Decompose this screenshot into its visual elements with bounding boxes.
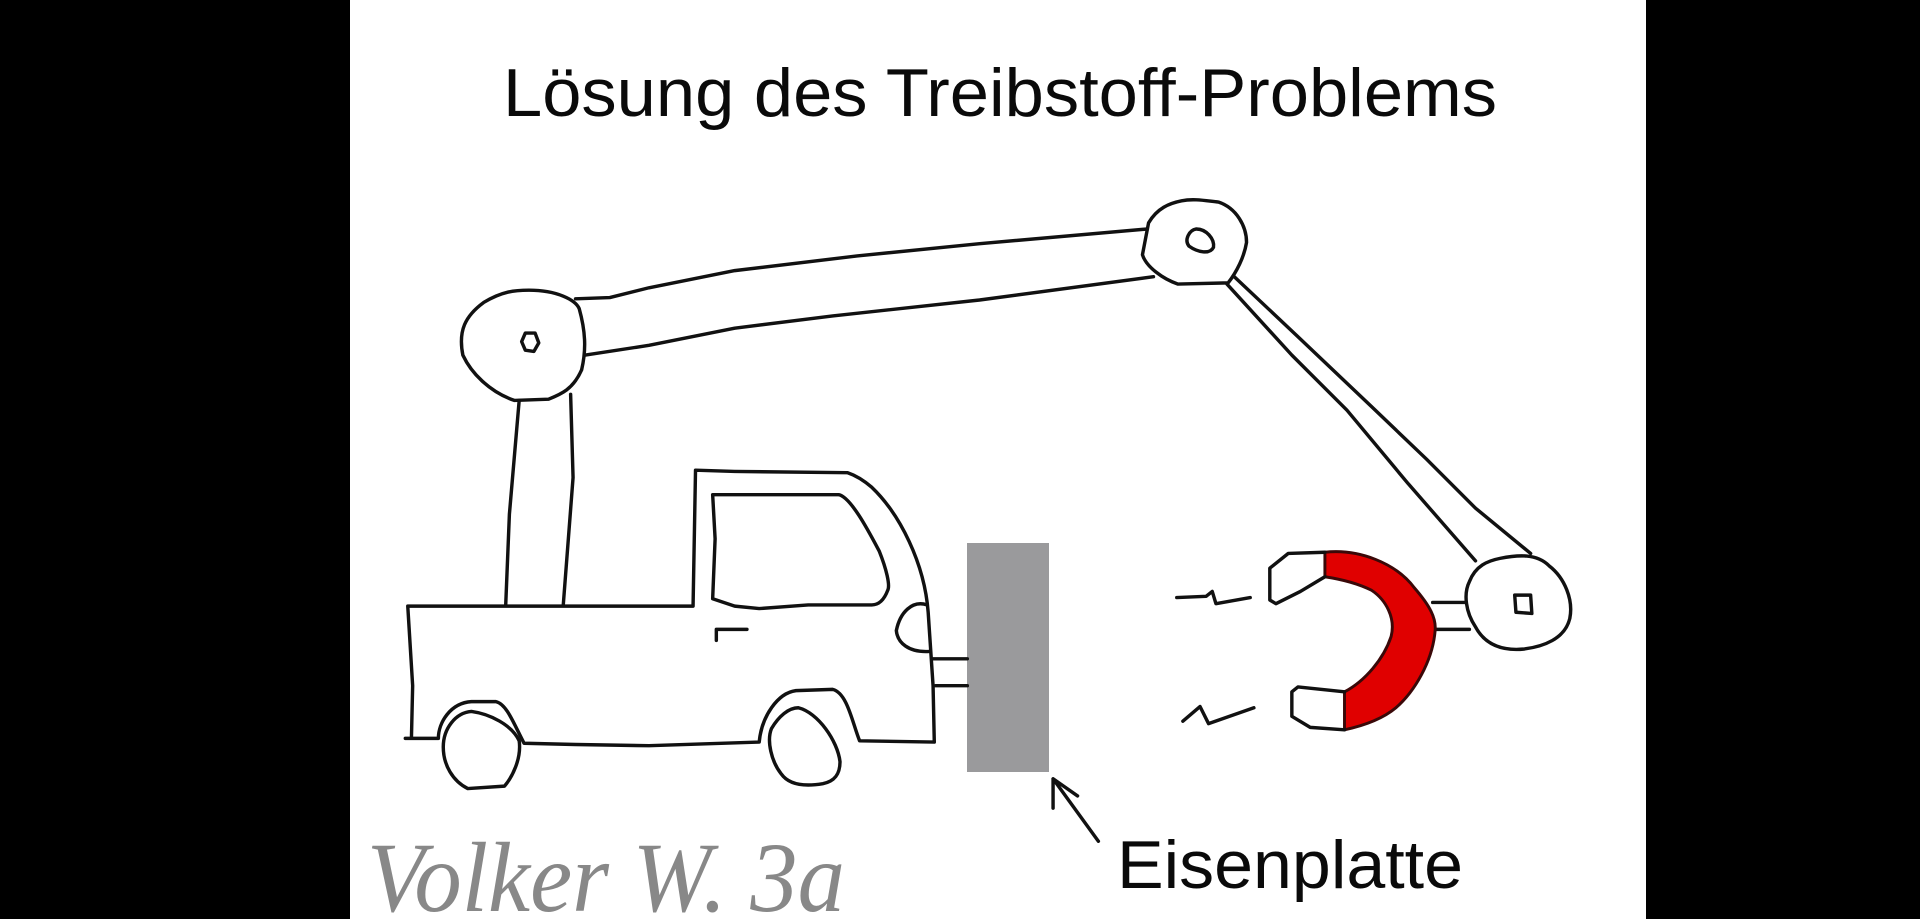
rear wheel bbox=[443, 711, 520, 789]
label: Eisenplatte: Eisenplatte bbox=[1117, 827, 1463, 903]
magnet pole top bbox=[1270, 552, 1325, 604]
joint: wrist bbox=[1466, 556, 1571, 649]
rods to plate bbox=[933, 659, 967, 686]
truck bbox=[405, 470, 967, 789]
front wheel bbox=[770, 708, 840, 785]
upper arm bbox=[576, 229, 1153, 355]
mast bbox=[506, 394, 573, 605]
title: Lösung des Treibstoff-Problems bbox=[503, 55, 1497, 131]
iron plate bbox=[967, 543, 1049, 772]
cab window bbox=[713, 495, 889, 609]
magnetic force mark top bbox=[1177, 591, 1250, 604]
magnetic force mark bottom bbox=[1183, 707, 1254, 724]
magnet mount bbox=[1433, 602, 1469, 629]
truck body bbox=[405, 470, 934, 746]
arrow to iron plate bbox=[1053, 779, 1098, 841]
magnet bbox=[1177, 552, 1435, 730]
joint: shoulder bbox=[461, 290, 585, 400]
magnet pole bottom bbox=[1292, 687, 1345, 730]
door handle bbox=[716, 629, 747, 640]
forearm bbox=[1227, 277, 1531, 561]
joint: elbow bbox=[1142, 200, 1247, 284]
magnet red body bbox=[1325, 552, 1435, 730]
headlight bbox=[896, 604, 929, 652]
crane arm drawing bbox=[461, 200, 1571, 649]
panel: white drawing page bbox=[350, 0, 1646, 919]
